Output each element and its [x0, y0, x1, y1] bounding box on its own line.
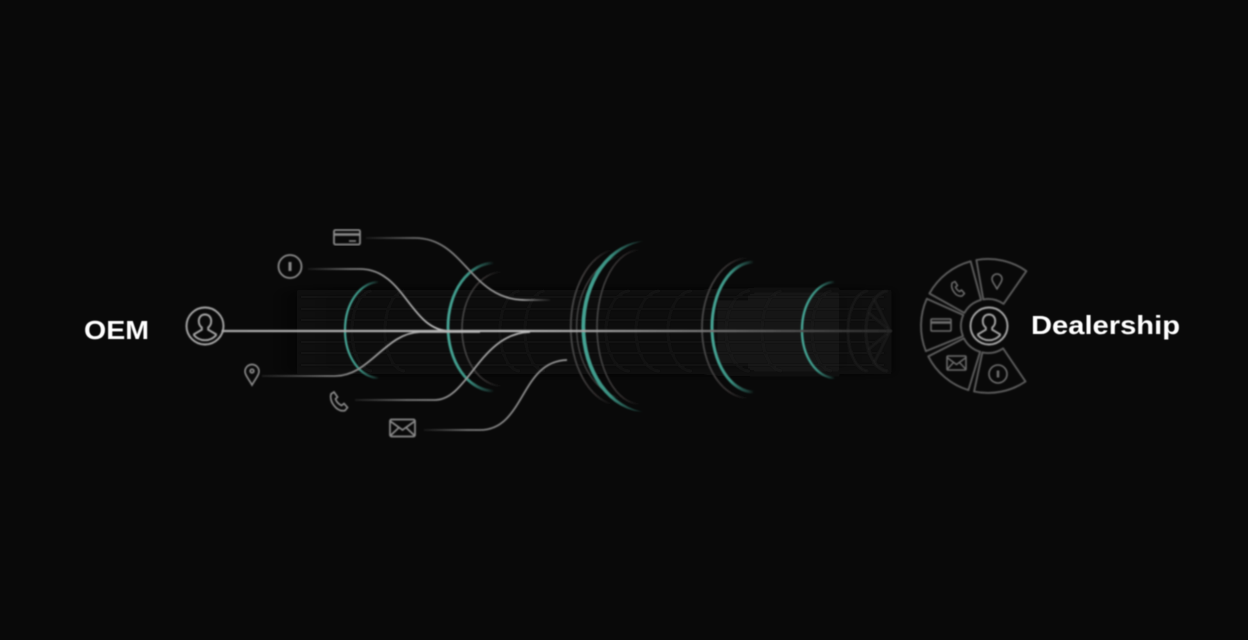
- icon: card: [334, 230, 360, 244]
- ring 2 grey arc: [462, 272, 502, 386]
- ring 3 second grey arc: [577, 256, 620, 398]
- icon: dealership person: [970, 308, 1008, 344]
- icon: mail: [390, 420, 415, 436]
- wedge: card: [921, 299, 963, 351]
- ring 3 teal crescent: [581, 241, 645, 412]
- wedge: mail: [928, 338, 980, 390]
- tube: faint wireframe cylinder: [300, 291, 890, 371]
- connector lines: [222, 238, 892, 430]
- icon: OEM person: [186, 308, 224, 344]
- ring 3 inner grey arc: [597, 250, 640, 404]
- line: dollar: [308, 269, 450, 331]
- label: Dealership: Dealership: [1031, 310, 1180, 340]
- dealership wheel: [921, 259, 1026, 393]
- wedge: dollar: [974, 348, 1026, 393]
- line: pin: [262, 332, 480, 376]
- wedge: phone: [929, 261, 981, 313]
- icon: location pin: [245, 364, 259, 385]
- line: phone: [355, 332, 530, 400]
- tube glow: [272, 290, 896, 374]
- label: OEM: OEM: [84, 315, 149, 345]
- icon: phone: [331, 392, 348, 411]
- ring 5 teal arc: [802, 282, 835, 378]
- line: card: [366, 238, 550, 300]
- main line: [222, 330, 892, 332]
- ring 2: [448, 263, 502, 391]
- ring 4 teal arc: [712, 262, 754, 392]
- ring 4 grey arc: [702, 258, 748, 398]
- ring 5: [802, 282, 835, 378]
- line: mail: [424, 360, 567, 430]
- wedge: location: [976, 259, 1026, 304]
- icon: dollar coin: [278, 255, 302, 278]
- ring 2 teal arc: [448, 263, 494, 391]
- ring 3 outer grey arc: [571, 250, 612, 404]
- ring 4: [702, 258, 754, 398]
- ring 1: [345, 282, 379, 378]
- ring 1 teal arc: [345, 282, 379, 378]
- ring 3: large: [571, 241, 645, 412]
